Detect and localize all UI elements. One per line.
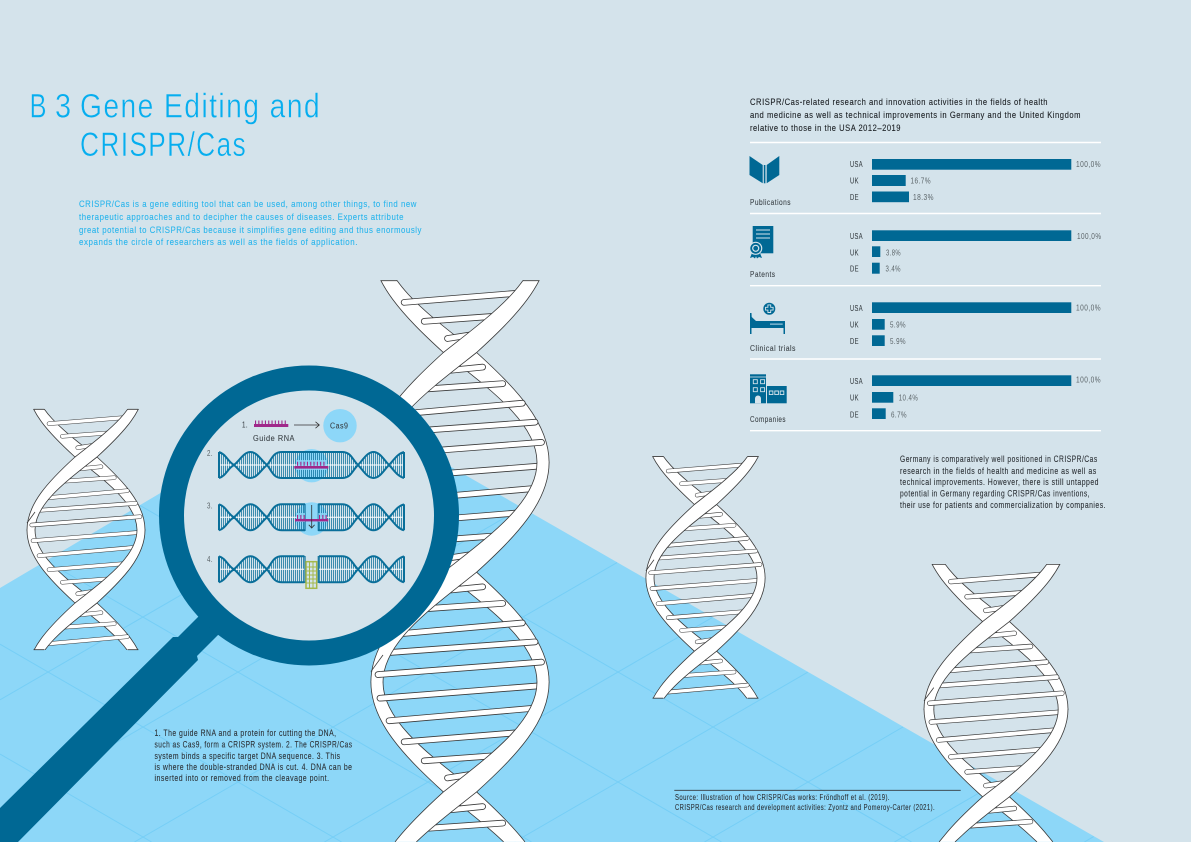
text: process caption bbox=[154, 728, 352, 783]
step 3: double-stranded DNA is cut: 3. bbox=[207, 501, 213, 511]
panel: companies: 100,0% bbox=[1076, 374, 1101, 384]
text: Germany summary: their use for patients and commercialization by companies. bbox=[900, 500, 1106, 510]
text: process caption: system binds a specific target DNA sequence. 3. This bbox=[154, 751, 340, 761]
DNA helix: far right bbox=[924, 533, 1068, 842]
chart heading bbox=[750, 97, 1081, 133]
panel: companies bbox=[750, 374, 1101, 424]
source note: Source: Illustration of how CRISPR/Cas works: Fröndhoff et al. (2019). bbox=[675, 793, 890, 802]
text: Germany summary: technical improvements. However, there is still untapped bbox=[900, 477, 1099, 487]
icon: company buildings bbox=[750, 374, 787, 403]
title: B bbox=[30, 88, 48, 126]
text: process caption: is where the double-stranded DNA is cut. 4. DNA can be bbox=[154, 762, 352, 772]
icon: hospital bed bbox=[750, 303, 785, 334]
text: process caption: such as Cas9, form a CRISPR system. 2. The CRISPR/Cas bbox=[154, 740, 352, 750]
text: Germany summary: Germany is comparatively well positioned in CRISPR/Cas bbox=[900, 454, 1098, 464]
intro text: great potential to CRISPR/Cas because it simplifies gene editing and thus enormously bbox=[79, 225, 422, 235]
icon: patent certificate bbox=[749, 226, 773, 258]
text: Germany summary bbox=[900, 454, 1106, 510]
step 1: guide RNA and Cas9: 1. bbox=[242, 420, 248, 430]
title: 3 bbox=[55, 88, 72, 126]
panel: clinical trials: Clinical trials bbox=[750, 343, 796, 353]
panel: patents: Patents bbox=[750, 269, 776, 279]
panel: clinical trials: 5.9% bbox=[890, 319, 906, 329]
title bbox=[30, 88, 321, 164]
source note bbox=[674, 790, 961, 812]
step 1: guide RNA and Cas9 bbox=[242, 409, 357, 443]
panel: companies: UK bbox=[850, 392, 859, 402]
panel: publications: 16.7% bbox=[910, 175, 931, 185]
title: Gene Editing and bbox=[80, 88, 321, 126]
step 1: guide RNA and Cas9: Cas9 bbox=[330, 420, 348, 430]
panel: companies: 6.7% bbox=[891, 409, 907, 419]
floor grid plane bbox=[0, 395, 1104, 842]
panel: patents: 3.4% bbox=[886, 263, 901, 273]
step 2: CRISPR/Cas binds target DNA bbox=[207, 448, 404, 482]
panel: patents: 100,0% bbox=[1077, 231, 1102, 241]
DNA helix: left bbox=[27, 384, 145, 676]
chart heading: CRISPR/Cas-related research and innovation activities in the fields of health bbox=[750, 97, 1048, 107]
panel: clinical trials: DE bbox=[850, 336, 859, 346]
magnifying glass lens bbox=[159, 366, 459, 666]
step 2: CRISPR/Cas binds target DNA: 2. bbox=[207, 448, 213, 458]
panel: patents: 3.8% bbox=[886, 247, 901, 257]
text: process caption: inserted into or removed from the cleavage point. bbox=[154, 773, 330, 783]
panel: clinical trials: 5.9% bbox=[890, 336, 906, 346]
chart heading: relative to those in the USA 2012–2019 bbox=[750, 123, 901, 133]
panel: companies: USA bbox=[850, 376, 863, 386]
magnifying glass handle bbox=[0, 590, 240, 842]
panel: publications: 18.3% bbox=[913, 192, 934, 202]
text: Germany summary: potential in Germany regarding CRISPR/Cas inventions, bbox=[900, 488, 1090, 498]
title: CRISPR/Cas bbox=[80, 126, 247, 164]
panel: patents: USA bbox=[850, 231, 863, 241]
panel: companies: 10.4% bbox=[899, 392, 918, 402]
step 1: guide RNA and Cas9: Guide RNA bbox=[253, 433, 295, 443]
text: Germany summary: research in the fields of health and medicine as well as bbox=[900, 466, 1097, 476]
intro text: therapeutic approaches and to decipher the causes of diseases. Experts attribute bbox=[79, 212, 404, 222]
text: process caption: 1. The guide RNA and a protein for cutting the DNA, bbox=[154, 728, 336, 738]
panel: publications bbox=[750, 156, 1101, 207]
panel: patents: DE bbox=[850, 263, 859, 273]
panel: publications: DE bbox=[850, 192, 859, 202]
panel: companies: DE bbox=[850, 409, 859, 419]
step 4: DNA inserted at cleavage point: 4. bbox=[207, 554, 213, 564]
DNA helix: large centre bbox=[371, 242, 549, 842]
panel: clinical trials: UK bbox=[850, 319, 859, 329]
panel: patents bbox=[749, 226, 1102, 279]
icon: open book bbox=[750, 156, 779, 183]
panel: publications: 100,0% bbox=[1076, 159, 1101, 169]
panel: publications: Publications bbox=[750, 197, 791, 207]
step 3: double-stranded DNA is cut bbox=[207, 501, 404, 536]
panel: clinical trials bbox=[750, 302, 1101, 353]
intro text: expands the circle of researchers as well as the fields of application. bbox=[79, 237, 358, 247]
panel: companies: Companies bbox=[750, 414, 786, 424]
source note: CRISPR/Cas research and development activities: Zyontz and Pomeroy-Carter (2021). bbox=[675, 803, 935, 812]
chart heading: and medicine as well as technical improvements in Germany and the United Kingdom bbox=[750, 110, 1081, 120]
intro text bbox=[79, 199, 422, 247]
panel: patents: UK bbox=[850, 247, 859, 257]
panel: publications: UK bbox=[850, 175, 859, 185]
panel: publications: USA bbox=[850, 159, 863, 169]
step 4: DNA inserted at cleavage point bbox=[207, 554, 404, 588]
intro text: CRISPR/Cas is a gene editing tool that can be used, among other things, to find new bbox=[79, 199, 417, 209]
DNA helix: middle right bbox=[646, 431, 765, 725]
panel: clinical trials: USA bbox=[850, 303, 863, 313]
panel: clinical trials: 100,0% bbox=[1076, 302, 1101, 312]
